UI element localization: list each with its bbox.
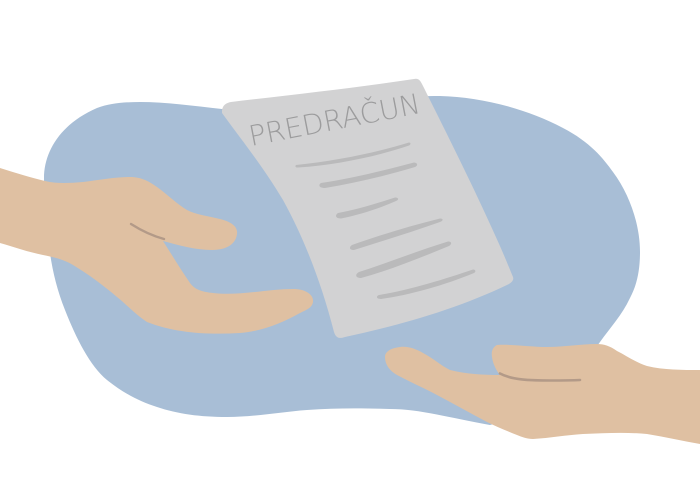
text line 2: [319, 162, 417, 188]
right hand shape: [385, 344, 700, 444]
text line 5: [356, 242, 451, 278]
heading: PREDRAČUN: PREDRAČUN: [246, 86, 423, 153]
text line 4: [350, 218, 443, 250]
right hand: [385, 344, 700, 444]
text line 1: [295, 142, 410, 168]
background blue blob: [44, 96, 640, 425]
right hand crease: [500, 374, 580, 380]
text line 6: [377, 270, 475, 299]
left hand: [0, 168, 313, 334]
left hand crease: [131, 224, 164, 239]
text line 3: [336, 198, 398, 218]
paper sheet: [222, 79, 513, 338]
invoice document: [222, 79, 513, 338]
left hand shape: [0, 168, 313, 334]
